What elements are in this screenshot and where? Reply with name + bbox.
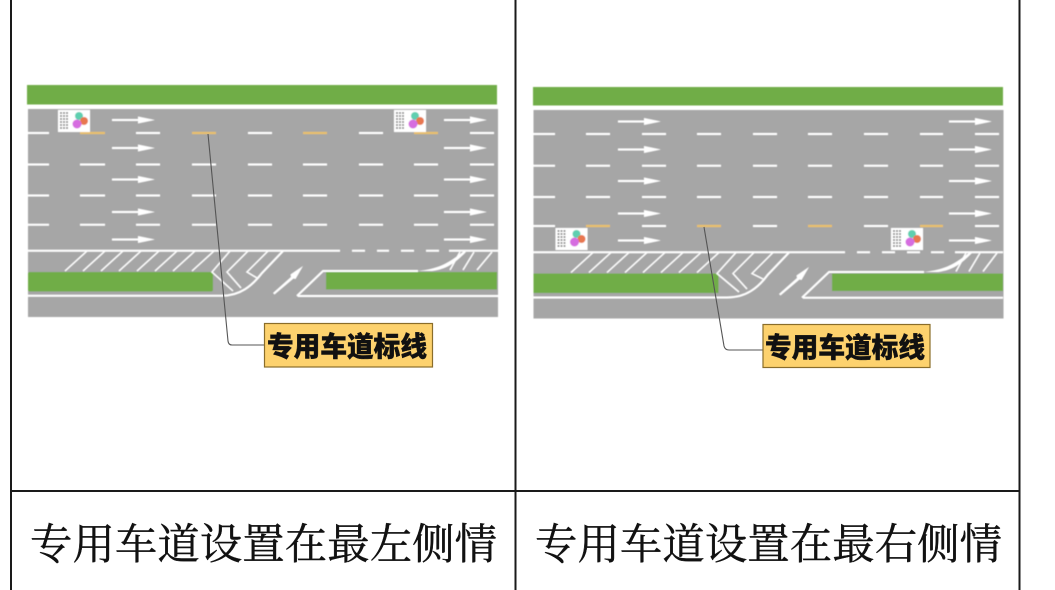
road surface [28,109,498,317]
straight arrows [618,118,992,244]
callout: right label: 专用车道标线 [765,332,925,363]
watermark logo, bottom right [891,228,923,250]
leader line, right [704,227,763,350]
watermark logo, top left [58,110,90,132]
green island, right [326,272,497,290]
green median, top [27,85,497,104]
caption: right column: 专用车道设置在最右侧情 [535,522,1002,569]
green island, left [534,274,718,293]
green island, right [832,274,1003,291]
leader line, left [208,134,265,345]
callout: left label: 专用车道标线 [267,331,427,362]
ramp markings [533,252,1003,298]
caption: left column: 专用车道设置在最左侧情 [30,522,497,569]
road surface [534,110,1004,318]
panel: dedicated lane on the far left [27,85,498,317]
gold dedicated-lane dashes [80,132,438,134]
green median, top [533,87,1003,106]
straight arrows [112,116,487,243]
merge curve wedge [923,252,972,272]
watermark logo, bottom left [556,228,588,250]
diagonal arrow [273,266,303,294]
white lane dashes [533,134,999,226]
green island, left [28,272,213,292]
diagonal arrow [779,267,809,296]
white lane dashes [27,133,494,225]
watermark logo, top right [394,110,426,132]
callout: left label [264,324,432,367]
ramp markings [28,251,498,296]
gold dedicated-lane dashes [586,225,943,227]
panel: dedicated lane on the far right [533,87,1004,318]
merge curve wedge [417,251,466,271]
